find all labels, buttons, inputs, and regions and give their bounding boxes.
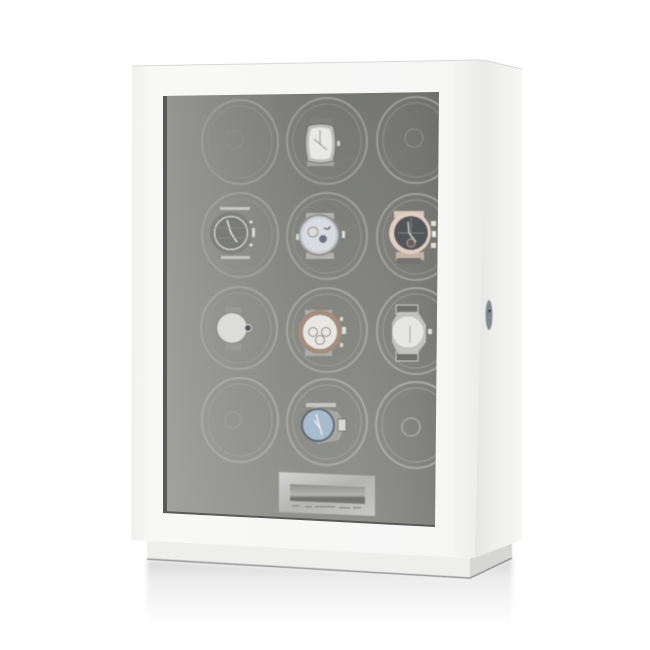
watch: moonphase chronograph (296, 213, 345, 259)
cabinet front frame (131, 60, 487, 558)
watch: blue dial steel (301, 403, 346, 444)
watches (210, 118, 436, 444)
watch: tonneau (306, 118, 340, 166)
rotor row 3 (201, 287, 455, 374)
watch: ballon style (216, 307, 252, 350)
cabinet side panel (474, 60, 522, 558)
rotor row 1 (202, 97, 455, 184)
watch: dark dial diver (210, 207, 255, 259)
rotor row 2 (202, 193, 455, 280)
rotor row 4 (202, 378, 456, 468)
base plinth (147, 540, 512, 578)
side lock (486, 300, 492, 330)
floor reflection (147, 558, 512, 625)
glass window (163, 92, 439, 527)
watch: rose gold black dial (389, 211, 436, 264)
watch: gold bezel chronograph (298, 310, 346, 356)
product illustration: 12-rotor watch winder cabinet (131, 60, 522, 604)
watch: steel octagon (392, 305, 432, 361)
panel buttons (292, 505, 361, 508)
winder rotors (201, 97, 456, 468)
control panel (279, 472, 375, 516)
LCD display (290, 484, 365, 504)
brushed metal plate (279, 472, 375, 516)
